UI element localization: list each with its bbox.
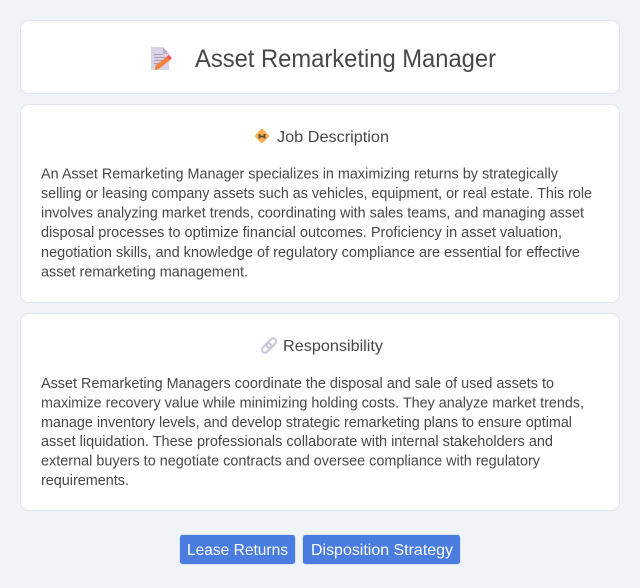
- icon: document with pencil: [151, 47, 172, 70]
- text block: responsibility: Asset Remarketing Managers coordinate the disposal and sale of used assets to: [41, 376, 554, 392]
- panel: title card: [20, 20, 620, 94]
- text block: responsibility: [41, 376, 584, 489]
- text block: responsibility: asset liquidation. These professionals collaborate with internal stakeholders and: [41, 434, 553, 450]
- tag: disposition strategy: [302, 534, 460, 564]
- text block: job description: selling or leasing company assets such as vehicles, equipment, or real estate. This role: [41, 186, 592, 202]
- icon: road sign diamond: [254, 128, 270, 144]
- tag: disposition strategy: Disposition Strategy: [311, 542, 453, 559]
- text block: responsibility: external buyers to negotiate contracts and oversee compliance with regulatory: [41, 454, 541, 470]
- heading: responsibility: Responsibility: [283, 338, 383, 355]
- icon: link: [261, 337, 277, 354]
- text block: job description: negotiation skills, and knowledge of regulatory compliance are essential for effective: [41, 245, 580, 261]
- text block: job description: An Asset Remarketing Manager specializes in maximizing returns by strategically: [41, 166, 559, 182]
- tag: lease returns: [180, 534, 296, 564]
- heading: job description: Job Description: [277, 129, 389, 146]
- text block: job description: asset remarketing management.: [41, 264, 248, 280]
- text block: job description: [41, 166, 592, 280]
- text block: responsibility: maximize recovery value while minimizing holding costs. They analyze market trends,: [41, 396, 584, 412]
- panel: job description: [20, 104, 620, 302]
- title: Asset Remarketing Manager: [195, 45, 496, 73]
- text block: job description: disposal processes to optimize financial outcomes. Proficiency in asset valuation,: [41, 225, 562, 241]
- tag: lease returns: Lease Returns: [187, 542, 288, 559]
- text block: responsibility: requirements.: [41, 473, 129, 489]
- panel: responsibility: [20, 314, 620, 510]
- text block: job description: involves analyzing market trends, coordinating with sales teams, and managing asset: [41, 206, 584, 222]
- text block: responsibility: manage inventory levels, and develop strategic remarketing plans to ensure optimal: [41, 415, 572, 431]
